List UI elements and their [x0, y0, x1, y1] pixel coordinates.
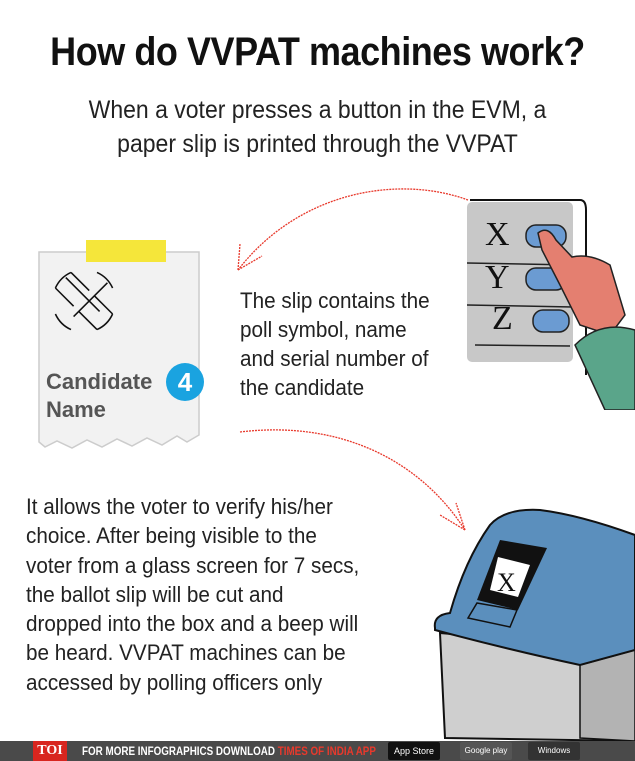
illustration: VVPAT machine: X: [497, 568, 516, 597]
text: verification process: dropped into the box and a beep will: [26, 611, 358, 636]
illustration: EVM with hand: Y: [485, 259, 510, 296]
illustration: EVM with hand: X: [485, 216, 510, 253]
illustration: VVPAT machine: [434, 508, 635, 741]
text: slip contents: The slip contains the: [240, 288, 430, 313]
icon: poll symbol: [55, 272, 113, 330]
app store badges: [388, 742, 440, 760]
illustration: EVM with hand: Z: [492, 300, 513, 337]
footer text: FOR MORE INFOGRAPHICS DOWNLOAD TIMES OF INDIA APP: [82, 744, 376, 758]
illustration: EVM with hand: [467, 199, 635, 410]
text: slip contents: and serial number of: [240, 346, 429, 371]
text: verification process: the ballot slip will be cut and: [26, 582, 284, 607]
text: verification process: It allows the voter to verify his/her: [26, 494, 333, 519]
subtitle: When a voter presses a button in the EVM, a: [89, 96, 546, 124]
title: How do VVPAT machines work?: [50, 30, 585, 74]
serial number badge: [166, 363, 204, 401]
candidate name: Name: [46, 397, 106, 422]
app store badges: App Store: [394, 746, 434, 756]
text: verification process: voter from a glass screen for 7 secs,: [26, 553, 359, 578]
panel: paper slip: [38, 240, 204, 449]
TOI logo: [33, 741, 67, 761]
tape: [86, 240, 166, 262]
text: slip contents: [240, 288, 430, 400]
text: verification process: accessed by polling officers only: [26, 670, 322, 695]
arrow: EVM to slip: [238, 189, 468, 270]
text: slip contents: poll symbol, name: [240, 317, 407, 342]
candidate name: [46, 369, 152, 422]
footer bar: [0, 741, 635, 761]
text: slip contents: the candidate: [240, 375, 364, 400]
arrow: slip to VVPAT: [240, 430, 465, 530]
text: verification process: choice. After being visible to the: [26, 523, 317, 548]
TOI logo: TOI: [37, 743, 63, 758]
footer bar: Google play: [465, 746, 507, 755]
text: verification process: be heard. VVPAT machines can be: [26, 640, 346, 665]
subtitle: [88, 96, 546, 158]
footer bar: Windows: [538, 746, 570, 755]
text: verification process: [26, 494, 359, 695]
subtitle: paper slip is printed through the VVPAT: [117, 130, 518, 158]
candidate name: Candidate: [46, 369, 152, 394]
serial number badge: 4: [178, 367, 192, 397]
